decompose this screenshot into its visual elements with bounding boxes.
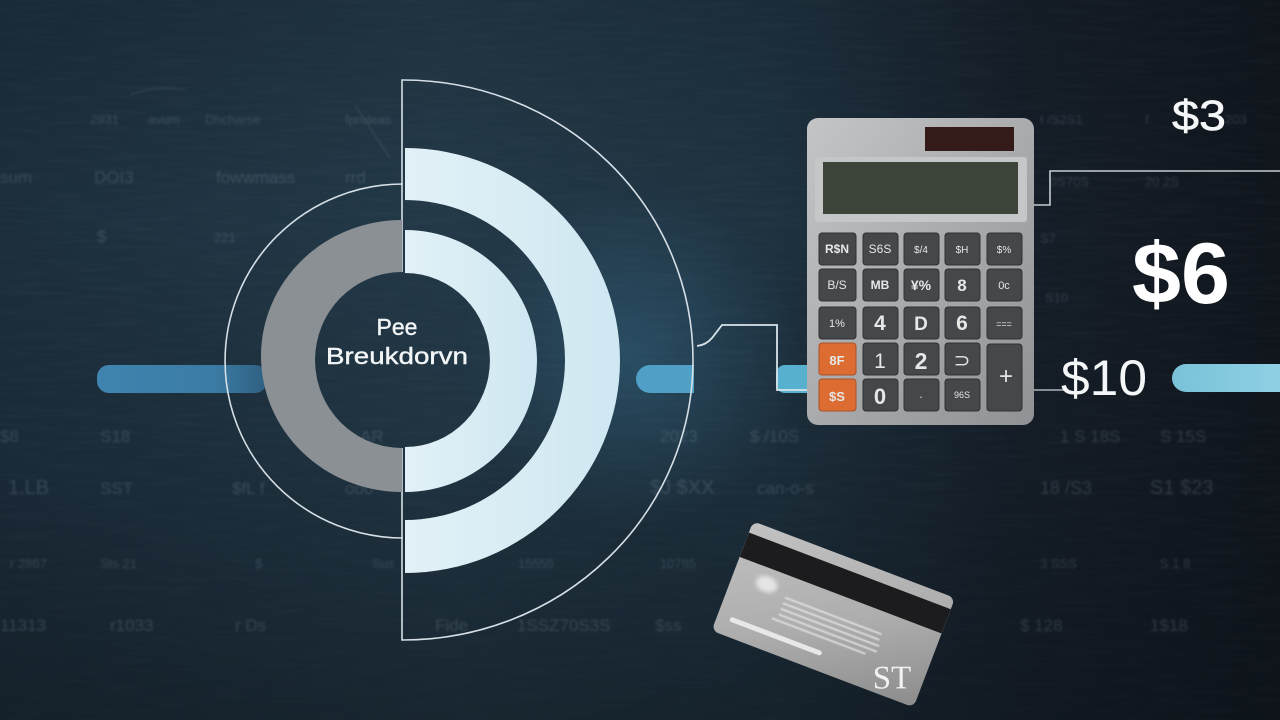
blue bar: left [97, 365, 267, 393]
blue bar: before calculator [776, 365, 812, 393]
faint background figures: S 15S [1160, 427, 1206, 446]
callout: $3: $3 [1172, 92, 1226, 140]
card body [712, 521, 955, 707]
key labels: 2 [915, 348, 927, 374]
faint background figures: S18 [100, 427, 130, 446]
key labels: + [999, 363, 1013, 390]
faint background figures: S7 [1040, 231, 1056, 246]
faint background figures: 2023 [660, 427, 698, 446]
faint background figures: Sus [372, 556, 395, 571]
key labels: $% [997, 245, 1011, 256]
left thin circle outline [225, 184, 403, 538]
card mark: ST [873, 660, 911, 696]
key labels: $/4 [914, 245, 928, 256]
key labels: . [919, 387, 923, 401]
credit card [710, 521, 955, 711]
faint background figures: $J $XX [650, 477, 714, 499]
faint background figures: 1SSZ70S3S [517, 616, 611, 635]
faint background figures: SST [100, 479, 133, 498]
faint background figures: S1 $23 [1150, 477, 1213, 499]
faint background figures: r1033 [110, 616, 153, 635]
blue bar: centre [636, 365, 694, 393]
faint background figures: fowwmass [216, 168, 295, 187]
key labels: 1% [829, 318, 845, 330]
key labels: B/S [827, 278, 847, 292]
outer light ring segment [405, 148, 620, 573]
faint background figures: $ [97, 227, 107, 246]
donut centre label: Pee [377, 314, 417, 340]
faint background figures: S10 [1045, 290, 1068, 305]
connector: calculator to top rule [1034, 171, 1280, 205]
faint background figures: avum [148, 112, 180, 127]
faint background figures: S 1 8 [1160, 556, 1190, 571]
display [815, 157, 1027, 222]
faint background figures: can-o-s [757, 479, 814, 498]
faint background figures: Dhcharse [205, 112, 261, 127]
faint background figures: f [1145, 112, 1149, 127]
faint background figures: 3 SSS [1040, 556, 1077, 571]
calculator body [807, 118, 1034, 425]
faint background figures: $fL f [232, 479, 265, 498]
faint background figures [0, 88, 1247, 635]
solar panel [925, 127, 1014, 151]
callout: $6: $6 [1132, 226, 1230, 322]
faint background figures: t /S2S1 [1040, 112, 1083, 127]
key labels: MB [871, 278, 890, 292]
faint background figures: 0S70S [1050, 174, 1089, 189]
connector: calculator to $10 [1033, 389, 1064, 391]
donut centre label [326, 314, 468, 369]
inner light ring segment [405, 230, 537, 492]
key labels: 8 [957, 276, 967, 295]
key labels: ¥% [911, 277, 932, 293]
key labels: 0 [874, 384, 886, 409]
key labels: S6S [869, 242, 891, 256]
name strip [729, 617, 822, 656]
faint background figures: $ [255, 556, 263, 571]
donut centre label: Breukdorvn [326, 343, 468, 369]
faint background figures: AR [360, 427, 384, 446]
key labels: 96S [954, 390, 970, 400]
blurred details [772, 596, 883, 657]
key labels: $S [829, 389, 845, 404]
key labels: 8F [829, 353, 845, 368]
faint background figures: sum [0, 168, 32, 187]
magnetic stripe [740, 533, 951, 634]
faint background figures: $ /10S [750, 427, 799, 446]
faint background figures: 1.LB [8, 477, 49, 499]
donut chart [225, 80, 693, 640]
faint background figures: $ 128 [1020, 616, 1063, 635]
faint background figures: 18 /S3 [1040, 478, 1092, 498]
faint background figures: 221 [214, 230, 236, 245]
keypad [819, 233, 1022, 411]
faint background figures: ooo [345, 479, 373, 498]
key labels: D [914, 314, 928, 335]
key labels: 4 [874, 312, 886, 335]
faint background figures: 10785 [660, 556, 696, 571]
faint background figures: DOI3 [94, 168, 134, 187]
faint background figures: 15555 [518, 556, 554, 571]
blurred hologram [754, 573, 780, 596]
faint background figures: 20 2S [1145, 174, 1179, 189]
faint background figures: $8 [0, 427, 19, 446]
faint background figures: rrd [345, 168, 366, 187]
right thin arc outline [402, 80, 693, 640]
faint background figures: 11313 [0, 616, 46, 635]
grey ring segment [261, 220, 402, 492]
faint background figures: Fide [435, 616, 468, 635]
key labels: ⊃ [954, 350, 970, 372]
key labels: 0c [998, 280, 1010, 292]
faint background figures: r Ds [235, 616, 266, 635]
calculator icon [807, 118, 1034, 425]
key labels: === [996, 319, 1012, 329]
key labels: $H [956, 245, 968, 256]
faint background figures: 1 S 18S [1060, 427, 1120, 446]
faint background figures: r 2867 [10, 556, 47, 571]
faint background figures: 2931 [90, 112, 119, 127]
key labels: 1 [874, 350, 886, 373]
faint background figures: Sts 21 [100, 556, 137, 571]
key labels: R$N [825, 242, 849, 256]
connector: chart to calculator [697, 325, 808, 390]
faint background figures: 203 [1225, 112, 1247, 127]
faint background figures: $ss [655, 616, 681, 635]
faint background figures: 1$18 [1150, 616, 1188, 635]
callout: $10: $10 [1061, 350, 1147, 406]
faint background figures: fproleas [345, 112, 392, 127]
key labels: 6 [956, 312, 968, 335]
blue bar: right [1172, 364, 1280, 392]
key labels [825, 242, 1013, 409]
